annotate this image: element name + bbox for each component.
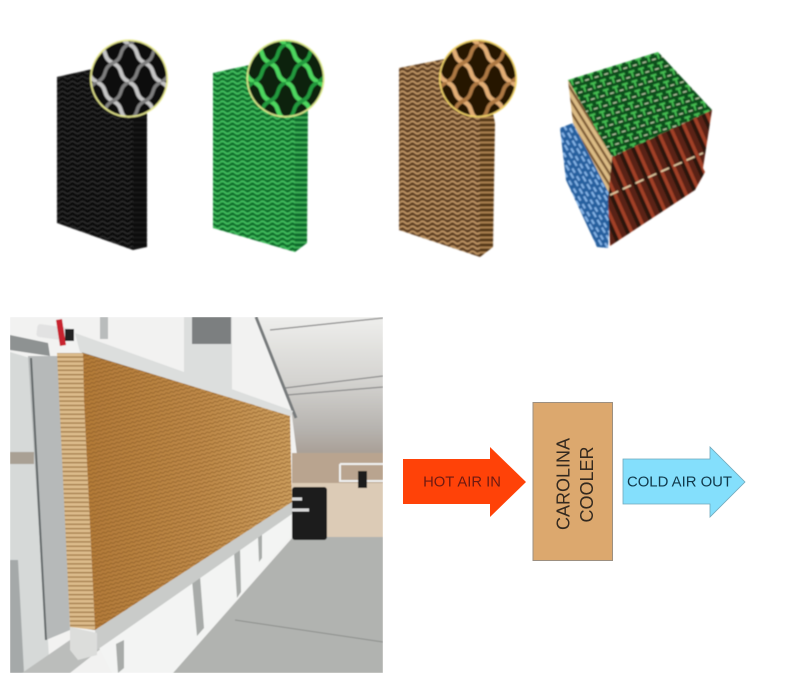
black pad magnified circle [90,40,168,118]
back wall [292,453,383,483]
roof struts [270,318,383,395]
diagonal roof beam [256,317,296,418]
window panels below pad [99,640,112,650]
arrow: cold air out [623,447,745,517]
concrete floor [173,537,383,673]
left glass panel [10,352,50,673]
panel: stacked multicolour cooling cubes [560,52,712,248]
lower back wall [292,483,383,537]
brown pad front face [399,52,480,257]
pad front face [83,353,292,630]
black water tank [292,487,327,540]
pad end grain [57,353,95,630]
box: Carolina Cooler [533,402,612,560]
brown pad side face [480,52,495,257]
label: cold air out: COLD AIR OUT [627,474,732,490]
black pad front face [57,60,133,250]
top rail shadow [82,352,155,376]
panel: brown cooling pad [399,40,517,257]
photo background [10,317,296,673]
arrow: hot air in [403,447,526,517]
upright post [100,317,108,339]
green pad side face [295,55,308,252]
cube seam [610,153,703,195]
panel: installed cooling pad photo [10,317,383,673]
tank pipes [291,499,309,510]
panel: green cooling pad [213,40,324,252]
distant horizon in glass [10,452,34,464]
brown pad magnified circle [439,40,517,118]
pipe rack [340,464,383,488]
label: hot air in: HOT AIR IN [423,474,501,490]
frame shadow [31,358,46,640]
vertical steel frame [28,356,70,640]
panel: airflow diagram [403,402,745,560]
top frame rail [75,333,293,418]
horizontal water pipe [10,335,50,356]
cube green top [568,52,712,157]
window posts [116,533,262,673]
floor joint [235,620,383,642]
label: Carolina: CAROLINA [554,438,574,530]
cube tan side [568,80,612,197]
panel: black cooling pad [57,40,168,250]
green pad front face [213,55,295,252]
bottom-left frame rail [24,640,100,673]
black pad side face [133,60,147,250]
cube red-brown side [608,110,712,246]
lower gutter [70,627,97,660]
lower pad rail [95,502,292,650]
upper window [184,317,232,389]
label: Cooler: COOLER [577,446,597,523]
greenhouse roof [262,325,383,454]
outer left post [10,560,24,673]
green pad magnified circle [246,40,324,118]
red shutoff valve [36,319,74,346]
cube blue side [560,123,611,248]
window grille [192,317,231,344]
